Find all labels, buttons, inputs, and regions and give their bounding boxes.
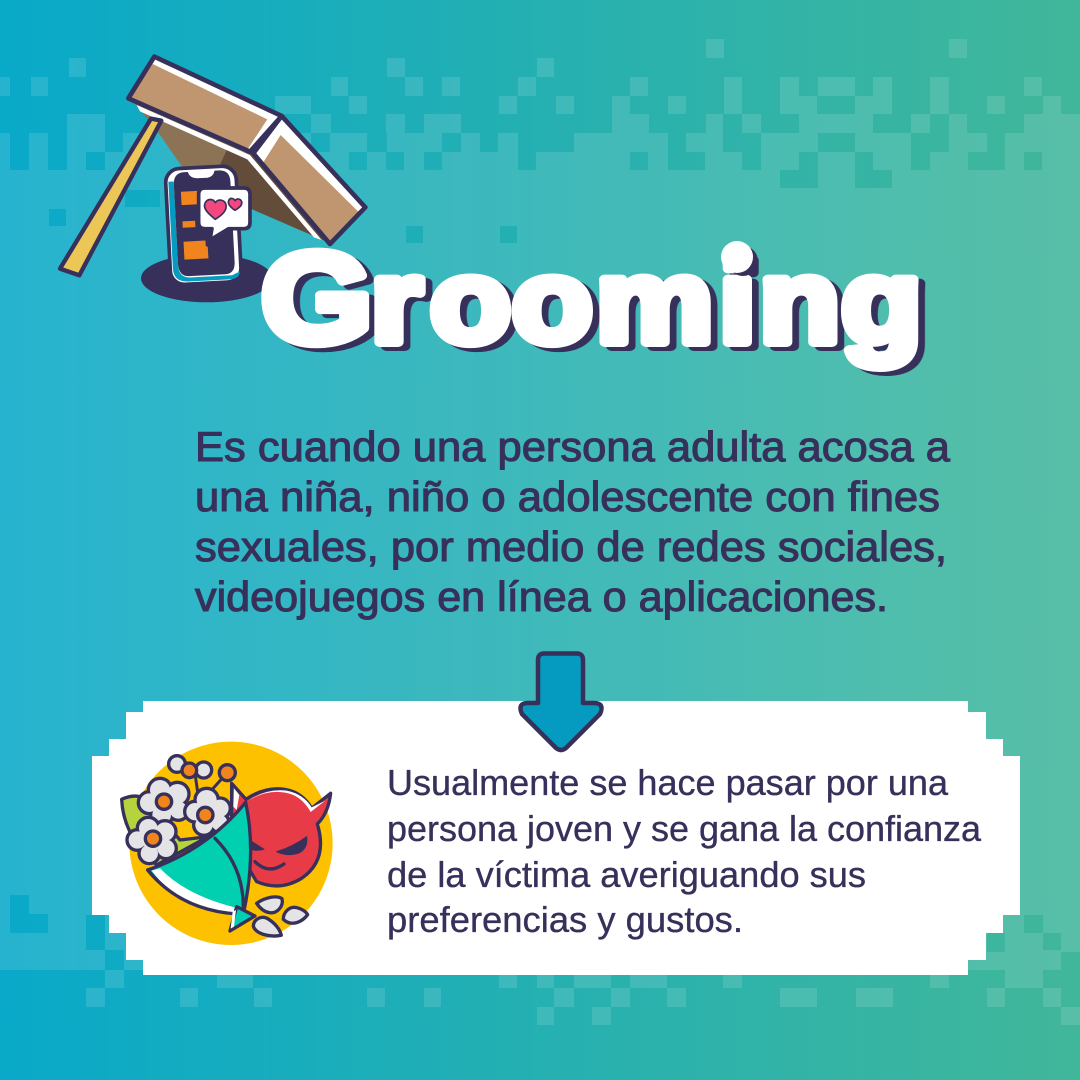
fallen petals: [253, 897, 308, 936]
yellow circle: [129, 742, 333, 945]
speech bubble with hearts: [199, 188, 250, 240]
flower three: [129, 819, 175, 862]
definition text: una niña, niño o adolescente con fines: [195, 473, 940, 520]
flower stems: [195, 773, 227, 797]
title: n: [759, 236, 840, 367]
title: m: [596, 236, 713, 367]
definition text: [195, 423, 951, 620]
box underside: [135, 103, 327, 242]
title: [261, 226, 922, 369]
green wrapping: [148, 802, 255, 931]
card text: [387, 762, 982, 940]
flower two: [186, 790, 229, 834]
definition text: Es cuando una persona adulta acosa a: [195, 423, 951, 470]
smartphone: [165, 166, 242, 285]
title: i: [719, 236, 756, 367]
box top flaps: [128, 57, 365, 244]
definition text: videojuegos en línea o aplicaciones.: [195, 573, 888, 620]
arrow pointing down: [520, 654, 602, 750]
card text: Usualmente se hace pasar por una: [387, 762, 949, 803]
wooden stick: [60, 119, 161, 275]
title: o: [512, 236, 593, 367]
title: o: [430, 236, 511, 367]
panel: white pixel card: [92, 654, 1020, 975]
card text: preferencias y gustos.: [387, 899, 743, 940]
definition text: sexuales, por medio de redes sociales,: [195, 523, 947, 570]
illustration: box trap with phone bait: [60, 57, 365, 302]
leaves: [122, 796, 208, 865]
card text: de la víctima averiguando sus: [387, 854, 866, 895]
flowers: [129, 780, 229, 862]
title: r: [371, 236, 422, 367]
title: G: [261, 226, 372, 369]
title: g: [841, 236, 922, 367]
devil face: [232, 783, 331, 886]
small buds: [169, 756, 235, 781]
ground shadow: [141, 254, 272, 302]
illustration: bouquet and devil: [122, 742, 333, 945]
flower one: [140, 780, 187, 824]
card text: persona joven y se gana la confianza: [387, 808, 982, 849]
